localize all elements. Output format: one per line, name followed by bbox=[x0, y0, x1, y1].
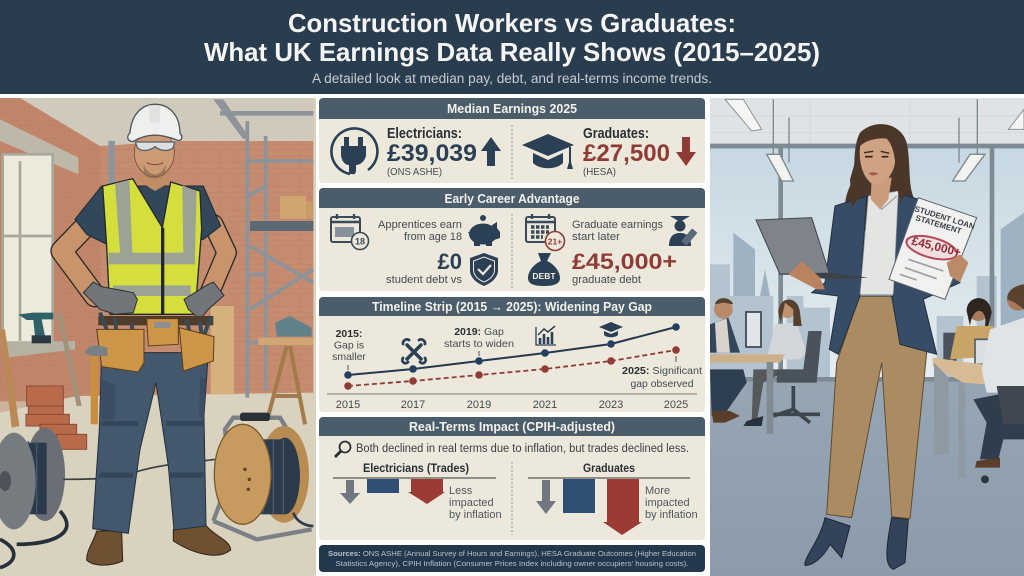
gloves bbox=[83, 282, 137, 314]
neck and face bbox=[871, 178, 892, 209]
chart: electricians: Electricians (Trades) bbox=[363, 463, 469, 475]
sources footer: Statistics Agency), CPIH Inflation (Consumer Prices Index including owner occupiers' housing costs). bbox=[336, 559, 688, 568]
graduates figure: Graduates: bbox=[583, 125, 649, 142]
line chart: 2017 bbox=[401, 399, 425, 411]
note 2025: 2025: Significant bbox=[622, 365, 702, 377]
hair front bbox=[850, 131, 907, 208]
electricians figure: Electricians: bbox=[387, 125, 462, 142]
zero debt: £0 bbox=[438, 249, 462, 274]
icon: magnifier bbox=[335, 442, 350, 457]
left cable spool bbox=[0, 428, 67, 568]
chart: graduates: Graduates bbox=[583, 463, 635, 475]
title bbox=[204, 8, 820, 67]
note 2015 bbox=[332, 328, 366, 363]
student loan statement: STUDENT LOAN bbox=[913, 204, 976, 231]
note 2019: 2019: Gap bbox=[454, 326, 504, 338]
icon: calendar 21+ bbox=[526, 214, 564, 250]
chart: graduates: impacted bbox=[645, 497, 690, 509]
icon: plug bbox=[331, 128, 377, 174]
right cable reel bbox=[213, 413, 313, 539]
icon: graduate with diploma bbox=[669, 216, 697, 246]
blazer bbox=[812, 193, 960, 354]
title: What UK Earnings Data Really Shows (2015–2025) bbox=[204, 37, 820, 67]
summary text: Both declined in real terms due to inflation, but trades declined less. bbox=[356, 443, 689, 455]
head bbox=[134, 129, 174, 177]
line chart: 2025 bbox=[664, 399, 688, 411]
shoes bbox=[805, 518, 850, 565]
icon: debt bag: DEBT bbox=[532, 271, 556, 281]
note 2019: starts to widen bbox=[444, 338, 514, 350]
chart: electricians bbox=[333, 463, 502, 521]
apprentices text: Apprentices earn bbox=[378, 219, 462, 231]
neck bbox=[142, 168, 168, 191]
apprentices text bbox=[378, 219, 462, 243]
chart: graduates bbox=[528, 463, 698, 535]
panel: early career advantage bbox=[319, 188, 705, 291]
graduate debt bbox=[572, 249, 677, 286]
arms bbox=[62, 224, 95, 296]
note 2015: Gap is bbox=[334, 340, 364, 352]
graduates figure bbox=[583, 125, 670, 178]
heading: real-terms: Real-Terms Impact (CPIH-adjusted) bbox=[409, 419, 615, 434]
ceiling lights bbox=[725, 99, 1024, 181]
sources footer: Sources: ONS ASHE (Annual Survey of Hours and Earnings), HESA Graduate Outcomes (Higher Education bbox=[328, 549, 696, 558]
skyline bbox=[710, 264, 997, 379]
safety glasses bbox=[135, 142, 175, 150]
title: Construction Workers vs Graduates: bbox=[288, 8, 736, 38]
tool belt bbox=[98, 316, 213, 325]
trousers bbox=[93, 353, 208, 533]
graduate debt: £45,000+ bbox=[572, 249, 677, 274]
chart: graduates: More bbox=[645, 485, 670, 497]
icon: shield check bbox=[470, 253, 498, 286]
electricians figure: £39,039 bbox=[387, 140, 477, 167]
header band bbox=[0, 0, 1024, 94]
window bbox=[3, 154, 75, 358]
left colleagues and desk bbox=[710, 298, 822, 434]
graduate earnings text bbox=[572, 219, 663, 243]
boots bbox=[87, 531, 123, 565]
center column background bbox=[316, 94, 710, 576]
icon: tools bbox=[402, 339, 426, 363]
panel: timeline bbox=[319, 297, 705, 412]
hi-vis vest bbox=[103, 179, 202, 314]
hair behind bbox=[845, 124, 917, 239]
trousers bbox=[827, 296, 927, 519]
right colleagues and desk bbox=[933, 284, 1024, 483]
heading: early career: Early Career Advantage bbox=[444, 192, 580, 206]
line chart: 2021 bbox=[533, 399, 557, 411]
icon: calendar 21+: 21+ bbox=[548, 236, 562, 246]
work table bbox=[258, 316, 313, 424]
note 2015: smaller bbox=[332, 351, 366, 363]
hard hat bbox=[128, 104, 182, 141]
heading: median earnings: Median Earnings 2025 bbox=[447, 102, 577, 116]
illustration: office graduate scene bbox=[710, 98, 1024, 576]
worker figure bbox=[62, 104, 231, 565]
icon: graduation cap bbox=[522, 134, 574, 169]
arrow up bbox=[481, 137, 501, 166]
panel: real-terms impact bbox=[319, 417, 705, 540]
t-shirt bbox=[75, 186, 221, 246]
chart: electricians: by inflation bbox=[449, 509, 502, 521]
graduates figure: £27,500 bbox=[583, 140, 670, 167]
chart: graduates: by inflation bbox=[645, 509, 698, 521]
electricians figure bbox=[387, 125, 477, 178]
arrow down bbox=[676, 137, 696, 166]
line chart: 2023 bbox=[599, 399, 623, 411]
line chart: 2019 bbox=[467, 399, 491, 411]
student loan statement bbox=[889, 198, 977, 299]
subtitle: A detailed look at median pay, debt, and real-terms income trends. bbox=[312, 71, 712, 86]
laptop bbox=[756, 218, 829, 274]
shirt bbox=[860, 191, 898, 294]
brick pile bbox=[26, 386, 87, 449]
chart: electricians: impacted bbox=[449, 497, 494, 509]
graduate woman figure bbox=[756, 124, 977, 569]
student loan statement: £45,000+ bbox=[910, 234, 962, 259]
student loan statement: STATEMENT bbox=[914, 213, 963, 236]
icon: rising chart bbox=[536, 326, 556, 345]
note 2019 bbox=[444, 326, 514, 350]
icon: cap on timeline bbox=[599, 322, 623, 337]
heading: timeline: Timeline Strip (2015 → 2025): Widening Pay Gap bbox=[372, 300, 652, 314]
electricians figure: (ONS ASHE) bbox=[387, 167, 442, 178]
icon: calendar 18 bbox=[331, 214, 368, 250]
icon: calendar 18: 18 bbox=[355, 236, 365, 246]
apprentices text: from age 18 bbox=[404, 231, 462, 243]
icon: debt bag bbox=[528, 253, 560, 286]
panel: median earnings bbox=[319, 98, 705, 183]
note 2025 bbox=[622, 365, 702, 390]
illustration: construction worker scene bbox=[0, 98, 316, 576]
cordless drill bbox=[18, 313, 53, 343]
line chart: 2015 bbox=[336, 399, 360, 411]
graduates figure: (HESA) bbox=[583, 167, 616, 178]
graduate earnings text: Graduate earnings bbox=[572, 219, 663, 231]
note 2015: 2015: bbox=[336, 328, 362, 340]
note 2025: gap observed bbox=[630, 378, 694, 390]
zero debt bbox=[386, 249, 463, 286]
chart: electricians: Less bbox=[449, 485, 473, 497]
icon: piggy bank bbox=[468, 215, 500, 246]
window frames bbox=[710, 146, 1024, 379]
graduate debt: graduate debt bbox=[572, 274, 641, 286]
zero debt: student debt vs bbox=[386, 274, 463, 286]
sources footer bbox=[319, 545, 705, 572]
line chart bbox=[327, 323, 697, 411]
scaffolding bbox=[247, 121, 313, 398]
graduate earnings text: start later bbox=[572, 231, 620, 243]
